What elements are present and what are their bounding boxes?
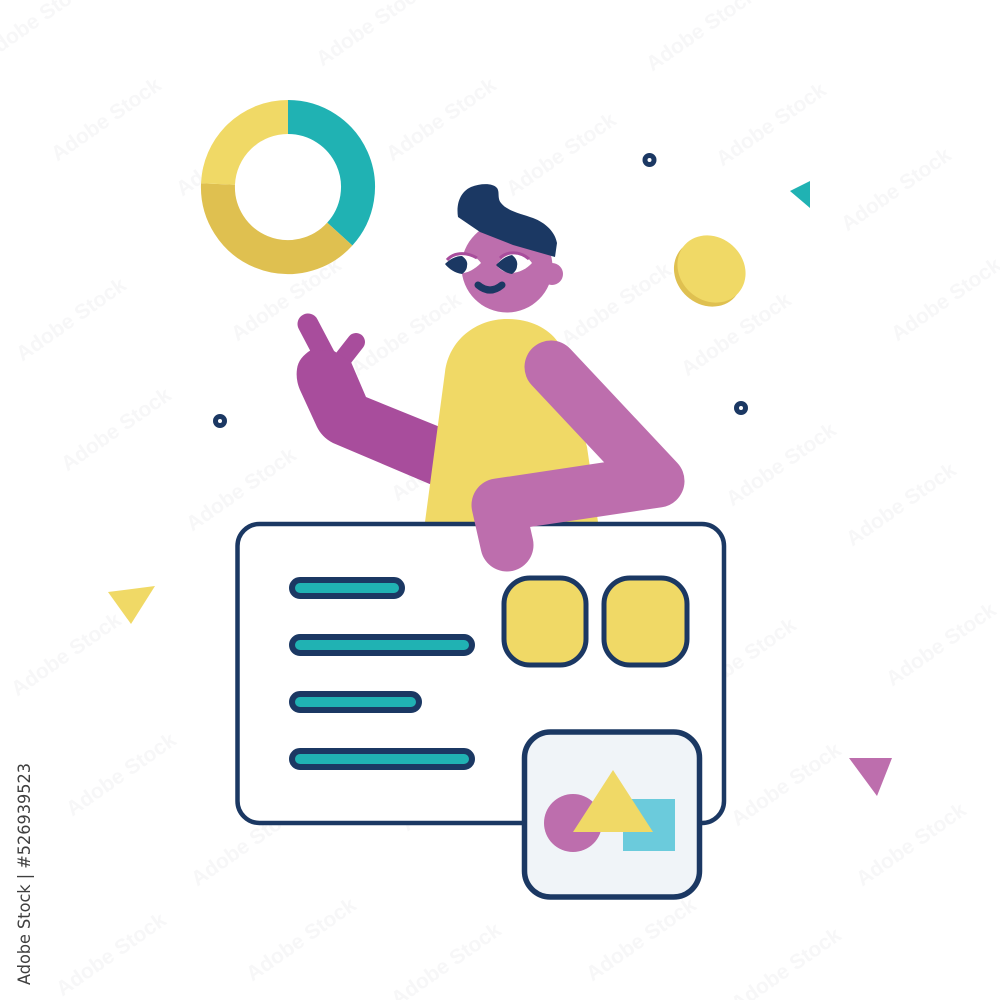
person: leaning arm [498,367,658,545]
donut chart [218,117,358,257]
watermark pattern: Adobe Stock [57,383,176,476]
watermark pattern: Adobe Stock [52,908,171,1000]
text bar 3 [292,694,419,710]
thumbnail square [623,799,675,851]
watermark pattern: Adobe Stock [382,73,501,166]
decorative dot: top [645,156,654,164]
decorative dot: left [216,416,224,426]
palm and forearm [297,350,440,485]
yellow button right [604,578,687,665]
teal triangle [790,181,810,208]
watermark pattern: Adobe Stock [712,78,831,171]
watermark pattern: Adobe Stock [172,108,291,201]
pink triangle [849,758,892,796]
main card [238,524,724,823]
donut segment: dark yellow [218,184,340,257]
watermark pattern: Adobe Stock [502,108,621,201]
right eye [496,253,532,274]
text bar 4 [292,751,472,767]
watermark pattern: Adobe Stock [397,743,516,836]
watermark pattern: Adobe Stock [47,73,166,166]
watermark pattern: Adobe Stock [62,728,181,821]
donut segment: teal [288,117,358,234]
watermark pattern: Adobe Stock [582,893,701,986]
watermark pattern: Adobe Stock [842,458,961,551]
thumbnail triangle [573,770,653,832]
text bar 2 [292,637,472,653]
finger 1 [308,324,328,362]
coin [660,222,759,320]
watermark pattern: Adobe Stock [562,573,681,666]
thumbnail circle [544,794,602,852]
stock credit: Adobe Stock | #526939523 [15,763,35,985]
watermark pattern: Adobe Stock [677,288,796,381]
watermark pattern: Adobe Stock [7,608,126,701]
watermark pattern: Adobe Stock [682,613,801,706]
ear [541,263,563,285]
watermark pattern: Adobe Stock [882,598,1000,691]
mouth [478,285,502,290]
text bar 1 [292,580,402,596]
yellow triangle [108,586,155,624]
watermark pattern: Adobe Stock [187,798,306,891]
person: raised arm and hand [297,324,440,485]
watermark pattern: Adobe Stock [182,443,301,536]
watermark pattern: Adobe Stock [852,798,971,891]
watermark pattern: Adobe Stock [387,413,506,506]
image thumbnail card [524,732,700,897]
face [462,222,552,312]
watermark pattern: Adobe Stock [727,738,846,831]
watermark pattern: Adobe Stock [227,253,346,346]
person: head [445,184,563,312]
watermark pattern: Adobe Stock [722,418,841,511]
watermark pattern: Adobe Stock [837,143,956,236]
watermark pattern: Adobe Stock [12,273,131,366]
watermark pattern: Adobe Stock [242,893,361,986]
donut segment: light yellow [218,117,288,184]
yellow button left [504,578,586,665]
finger 2 [338,342,356,365]
decorative dot: right [736,404,746,412]
watermark pattern: Adobe Stock [237,568,356,661]
watermark pattern: Adobe Stock [557,258,676,351]
watermark pattern: Adobe Stock [347,288,466,381]
left eye [445,253,481,274]
person: torso [425,319,598,522]
hair [458,184,557,257]
